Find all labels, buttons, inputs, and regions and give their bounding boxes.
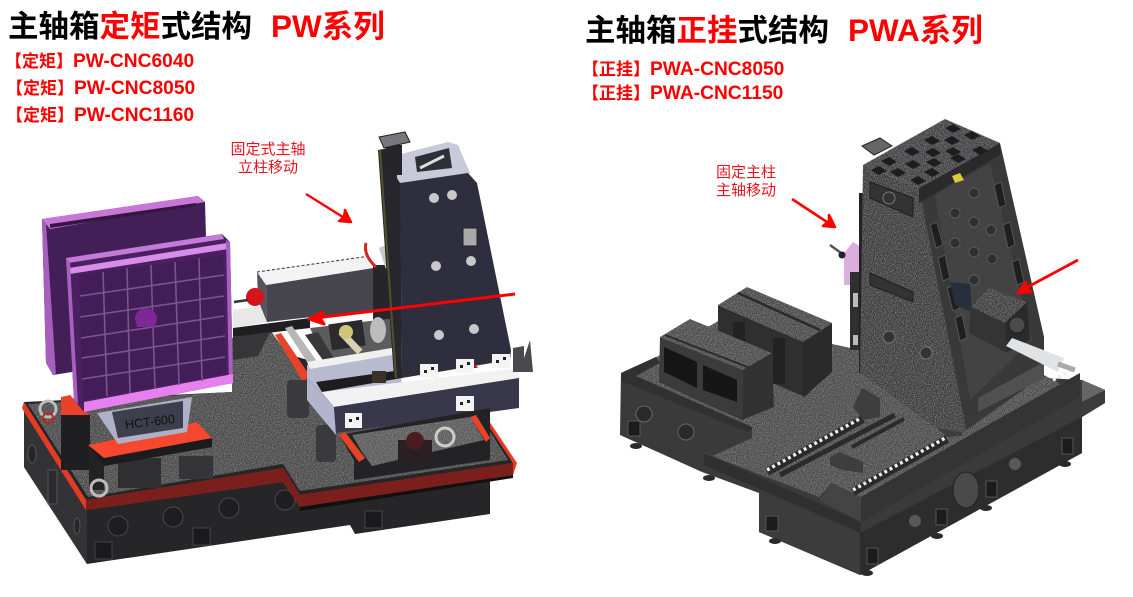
base floor <box>630 320 1080 497</box>
base casting <box>620 357 1105 576</box>
table stand <box>61 395 213 490</box>
label: HCT-600: HCT-600 <box>124 412 176 432</box>
title: right PWA series: 主轴箱正挂式结构 <box>585 14 829 48</box>
model list: left <box>5 51 195 126</box>
model list: left: 【定矩】PW-CNC1160 <box>6 105 194 126</box>
title: left PW series: 主轴箱定矩式结构 <box>8 10 252 44</box>
base rim <box>621 357 1105 533</box>
block B <box>718 287 832 398</box>
model list: left: 【定矩】PW-CNC8050 <box>6 78 195 99</box>
ball screw bay <box>285 317 398 372</box>
arrow: right callout <box>792 199 835 227</box>
fixed column <box>859 119 1044 433</box>
callout: fixed column, moving spindle: 固定主柱 <box>716 164 776 181</box>
arrow: right motor <box>1018 260 1078 293</box>
base casting <box>24 338 513 564</box>
machine: PWA series fixed column with moving spindle <box>620 119 1105 576</box>
front pallet plate <box>66 234 233 412</box>
title: left PW series <box>8 8 385 44</box>
red base rim <box>22 333 517 511</box>
callout: fixed column, moving spindle: 主轴移动 <box>716 182 776 199</box>
title: left PW series: PW系列 <box>271 8 385 44</box>
model list: right: 【正挂】PWA-CNC1150 <box>582 83 783 104</box>
eye bolts <box>40 401 455 496</box>
floor brackets <box>830 388 962 473</box>
title: right PWA series: PWA系列 <box>848 12 983 48</box>
under-saddle bay <box>339 408 490 480</box>
rear dark bar behind plates <box>233 318 310 337</box>
column <box>345 132 533 428</box>
spindle box <box>234 243 399 355</box>
block A <box>659 319 774 420</box>
base floor <box>28 330 508 497</box>
arrow: across left column <box>309 294 515 324</box>
model list: right: 【正挂】PWA-CNC8050 <box>582 59 784 80</box>
red spindle nose <box>246 288 264 306</box>
callout: fixed spindle, moving column: 立柱移动 <box>238 159 298 176</box>
arrow: left callout <box>306 194 351 222</box>
servo motor block <box>950 282 1075 372</box>
way covers <box>345 354 510 428</box>
callout: fixed column, moving spindle <box>716 164 776 199</box>
posts <box>287 380 336 462</box>
machine: PW series fixed spindle with moving column <box>22 132 533 564</box>
model list: right <box>582 59 784 104</box>
spindle head <box>830 242 861 350</box>
moving saddle <box>307 347 519 435</box>
callout: fixed spindle, moving column <box>230 141 306 176</box>
floor rails <box>767 368 1075 492</box>
model list: left: 【定矩】PW-CNC6040 <box>5 51 194 72</box>
title: right PWA series <box>585 12 983 48</box>
rear pallet plate <box>42 196 206 375</box>
callout: fixed spindle, moving column: 固定式主轴 <box>230 141 306 158</box>
